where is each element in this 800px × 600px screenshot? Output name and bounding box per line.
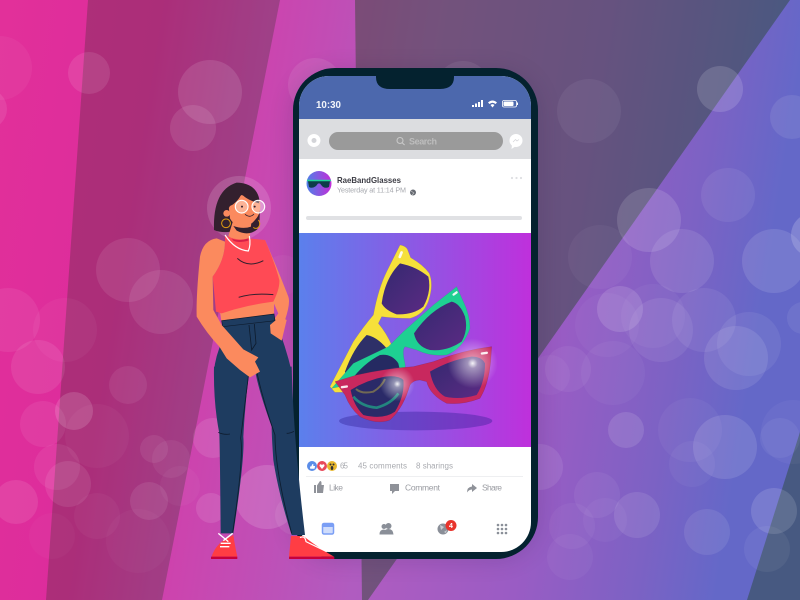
share button [467, 482, 502, 492]
more menu dots [511, 177, 522, 179]
left shoe [211, 533, 237, 559]
icon: globe [410, 190, 416, 196]
post author: RaeBandGlasses [337, 175, 401, 185]
lens glow right [448, 338, 498, 388]
like button: Like [329, 482, 343, 492]
lens glow left [380, 367, 415, 401]
post text placeholder [306, 216, 522, 220]
crop top [213, 235, 279, 313]
glasses [235, 200, 265, 213]
ear [223, 210, 230, 217]
right arm [265, 240, 289, 341]
sunglasses illustration [330, 245, 498, 430]
search pill: Search [409, 136, 437, 146]
dark wedge: bottom right [747, 432, 800, 600]
search bar background [299, 119, 531, 159]
hip hand [270, 317, 287, 341]
upper body [197, 183, 292, 377]
comments count: 45 comments [358, 462, 407, 470]
nav icon: globe with badge: 4 [449, 523, 453, 530]
nav icon: globe with badge [438, 520, 456, 534]
waistband [222, 314, 275, 327]
notch [376, 76, 454, 89]
midriff [220, 301, 274, 323]
search pill [329, 132, 503, 150]
hair [214, 183, 260, 233]
red sunglasses [335, 347, 492, 422]
right shoe [289, 536, 334, 559]
status icons [472, 100, 518, 108]
icon: camera [307, 134, 320, 147]
nav icon: feed [322, 524, 334, 534]
avatar [306, 171, 332, 196]
front arm and hand [197, 238, 260, 377]
comment button: Comment [405, 482, 441, 492]
post image background [299, 233, 531, 447]
fringe [226, 190, 259, 212]
phone body [293, 68, 538, 559]
reaction count: 65 [340, 462, 349, 470]
post time: Yesterday at 11:14 PM [337, 186, 406, 194]
phone shadow [293, 72, 538, 559]
status bar [299, 76, 531, 119]
nav icon: friends [380, 523, 394, 534]
legs and shoes [211, 367, 334, 559]
necklace [225, 235, 250, 251]
reaction icons [307, 461, 337, 471]
eyes and smile [241, 206, 256, 216]
screen background [299, 76, 531, 552]
icon: messenger [510, 134, 522, 149]
comment button [390, 482, 441, 494]
fly seam [249, 324, 256, 350]
status time: 10:30 [316, 99, 341, 111]
chin hair shadow [233, 223, 258, 233]
glasses shadow [339, 412, 492, 430]
dark wedge: top right [355, 0, 790, 600]
face [228, 195, 260, 226]
sharings count: 8 sharings [416, 462, 453, 470]
neck [228, 220, 252, 241]
jeans legs [214, 367, 305, 535]
like button [314, 481, 343, 493]
screen [299, 76, 531, 552]
jeans seams [218, 367, 294, 533]
dark band: left [46, 0, 280, 600]
nav icon: apps grid [497, 524, 507, 534]
woman character [197, 183, 334, 559]
phone [293, 68, 538, 559]
green sunglasses [332, 287, 470, 410]
yellow sunglasses [330, 245, 431, 392]
hips [214, 319, 292, 372]
earrings [222, 219, 260, 228]
share button: Share [482, 482, 502, 492]
